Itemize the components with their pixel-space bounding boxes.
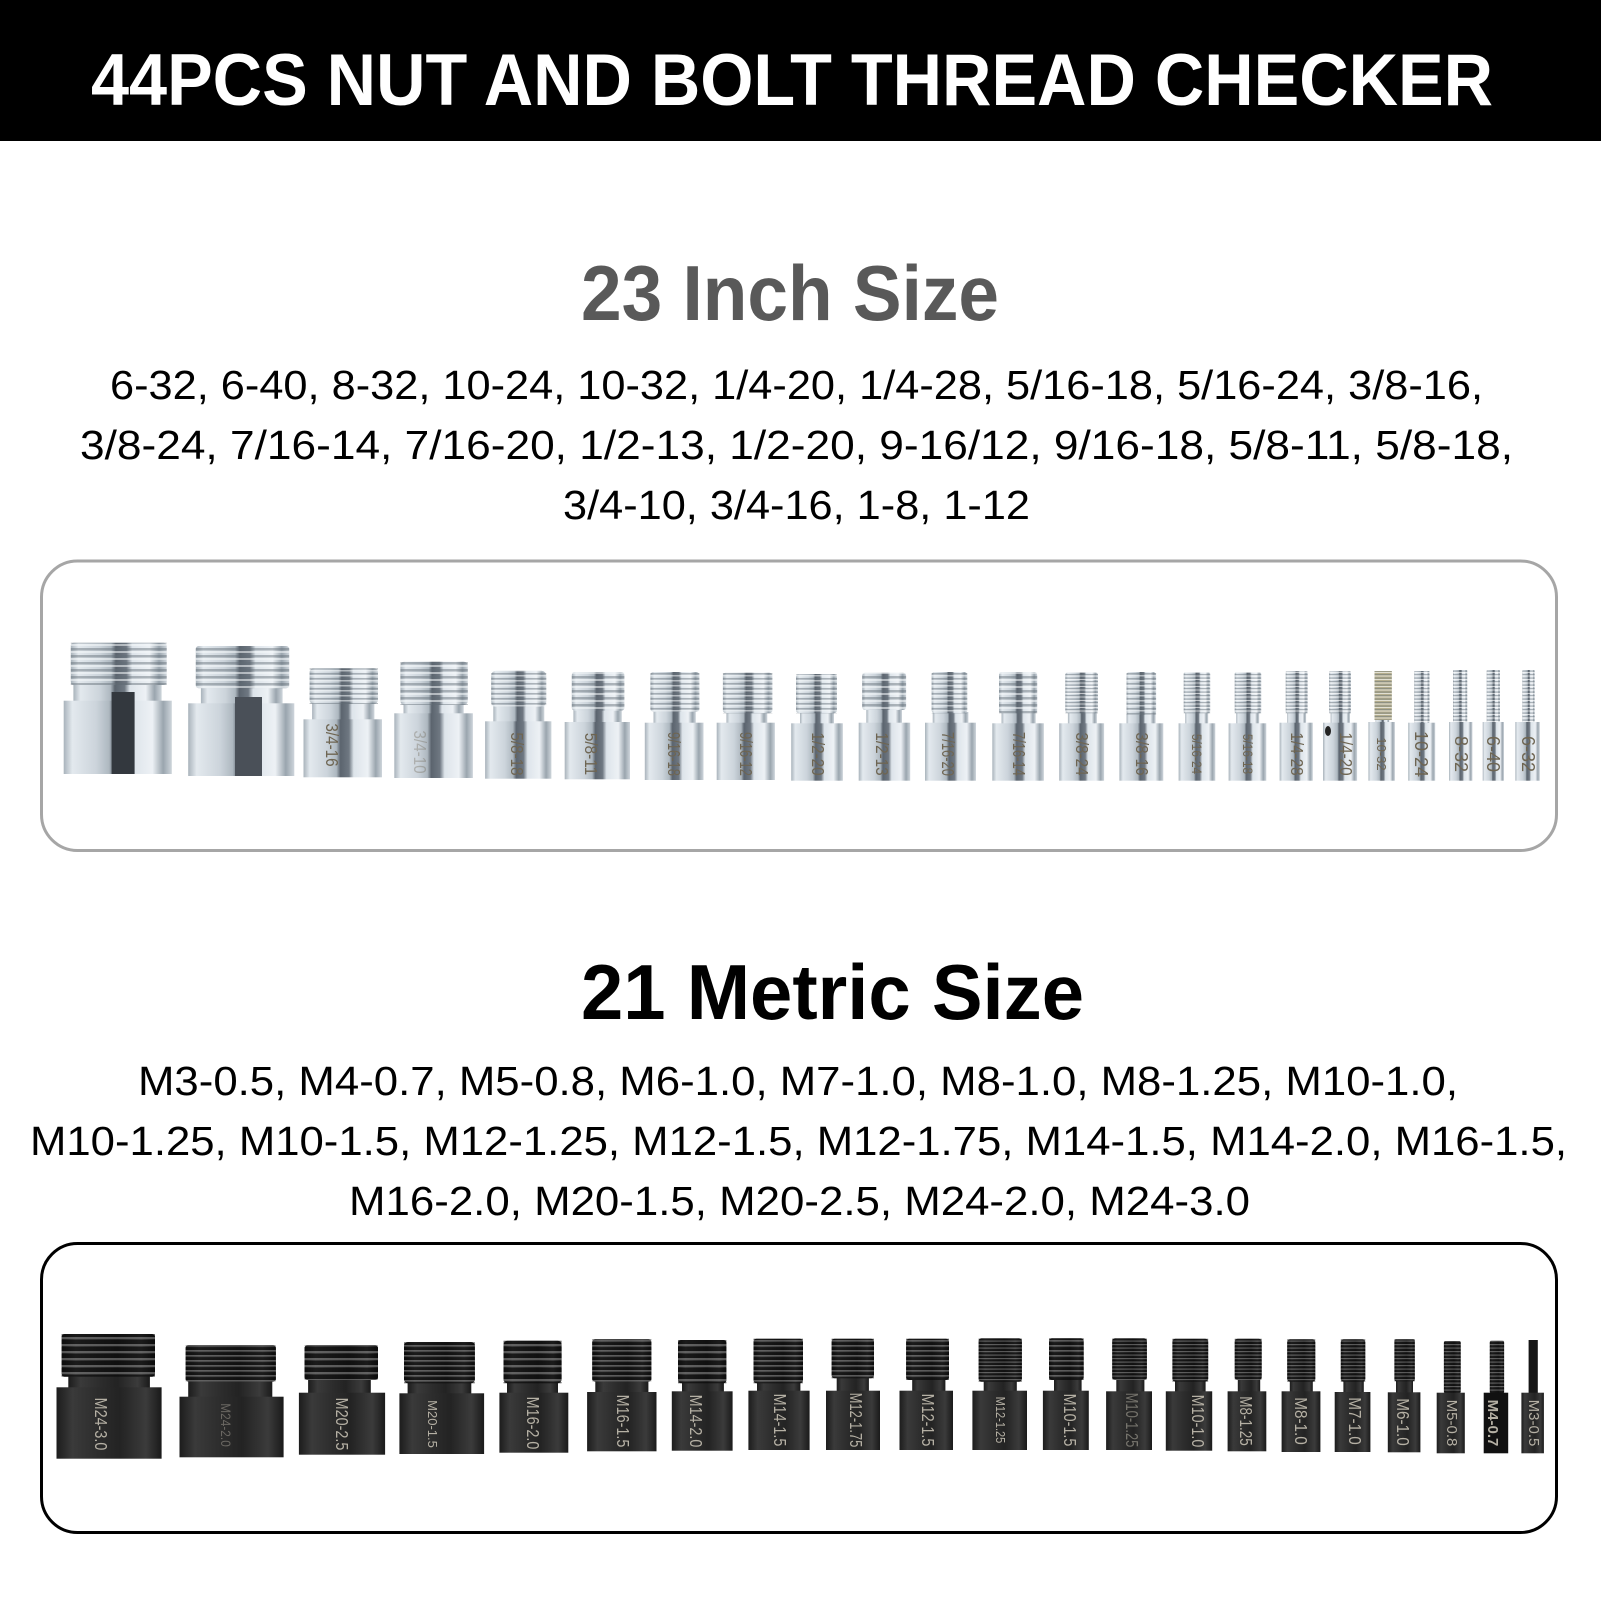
bolt: 1/4-28 [1280,671,1313,781]
bolt: 1/2-13: 1/2-13 [872,732,892,776]
bolt: M10-1.25: M10-1.25 [1121,1393,1141,1448]
bolt: M4-0.7 [1484,1341,1508,1453]
bolt: 5/16-18 [1229,672,1266,781]
bolt: 5/8-18: 5/8-18 [507,732,527,776]
text block: inch sizes: 6-32, 6-40, 8-32, 10-24, 10-32, 1/4-20, 1/4-28, 5/16-18, 5/16-24, 3/8-16, [110,362,1483,408]
bolt: 3/8-16 [1119,672,1163,781]
bolt: M16-1.5 [587,1339,656,1451]
bolt: 3/4-10: 3/4-10 [410,730,430,774]
bolt: M8-1.0 [1282,1339,1320,1452]
bolt: 9/16-12 [717,673,775,780]
bolt: M4-0.7: M4-0.7 [1484,1400,1501,1446]
bolt: 1/4-28: 1/4-28 [1287,732,1307,776]
bolt: M10-1.5: M10-1.5 [1060,1394,1079,1446]
bolt: M12-1.5: M12-1.5 [918,1394,937,1446]
bolt: 5/8-18 [485,671,551,779]
bolt: 5/16-24: 5/16-24 [1189,734,1205,774]
bolt: M14-1.5 [748,1339,810,1450]
bolt: 10-24 [1408,671,1435,781]
bolt: 5/16-24 [1179,672,1215,781]
title banner [0,0,1601,141]
bolt: 3/8-24: 3/8-24 [1072,732,1092,776]
bolt: 10-32 [1368,671,1395,781]
bolt: M20-2.5: M20-2.5 [332,1398,351,1450]
bolt: M10-1.0 [1166,1339,1212,1451]
bolt: 8-32: 8-32 [1451,736,1471,772]
bolt: M12-1.25: M12-1.25 [993,1397,1008,1444]
bolt: M24-2.0 [180,1345,284,1457]
bolt: 7/16-20 [925,672,976,781]
bolt: M3-0.5: M3-0.5 [1525,1400,1542,1446]
bolt: 8-32 [1449,670,1472,781]
bolt: 3/8-16: 3/8-16 [1132,732,1152,776]
bolt: 1/4-20 [1323,671,1357,781]
bolt: M24-3.0 [56,1334,162,1459]
bolt: M14-2.0: M14-2.0 [686,1395,705,1447]
bolt: 10-24: 10-24 [1411,731,1431,777]
text block: metric sizes [30,1058,1567,1224]
text block: metric sizes: M16-2.0, M20-1.5, M20-2.5, M24-2.0, M24-3.0 [349,1178,1250,1224]
bolt: 3/8-24 [1059,672,1104,781]
bolt: 1-8 [188,646,294,776]
bolt: M24-3.0: M24-3.0 [91,1398,110,1450]
bolt: M10-1.5 [1043,1338,1089,1450]
bolt: M5-0.8 [1437,1341,1465,1453]
text block: inch sizes [80,362,1513,528]
bolt: 9/16-18 [645,672,704,780]
bolt: M7-1.0: M7-1.0 [1345,1397,1365,1445]
bolt: 5/16-18: 5/16-18 [1240,734,1256,774]
text block: inch sizes: 3/8-24, 7/16-14, 7/16-20, 1/2-13, 1/2-20, 9-16/12, 9/16-18, 5/8-11, 5/8-18, [80,422,1513,468]
heading: 21 Metric Size: 21 Metric Size [581,948,1084,1036]
bolt: 1/4-20: 1/4-20 [1336,732,1356,776]
text block: metric sizes: M3-0.5, M4-0.7, M5-0.8, M6-1.0, M7-1.0, M8-1.0, M8-1.25, M10-1.0, [138,1058,1458,1104]
bolt: 6-40 [1483,670,1504,781]
bolt: M12-1.25 [972,1338,1027,1450]
bolt: M6-1.0: M6-1.0 [1393,1398,1413,1446]
bolt: 5/8-11: 5/8-11 [581,733,601,775]
bolt: 1/2-13 [859,673,910,781]
bolt: M20-1.5: M20-1.5 [425,1400,440,1448]
text block: metric sizes: M10-1.25, M10-1.5, M12-1.25, M12-1.5, M12-1.75, M14-1.5, M14-2.0, M16-1.5, [30,1118,1567,1164]
panel: inch thread checkers [42,561,1556,850]
heading: 23 Inch Size: 23 Inch Size [581,249,999,337]
bolt: M5-0.8: M5-0.8 [1443,1400,1460,1446]
bolt: M8-1.25: M8-1.25 [1235,1396,1255,1446]
bolt: M20-2.5 [299,1345,385,1455]
bolt: M24-2.0: M24-2.0 [218,1403,234,1447]
text block: inch sizes: 3/4-10, 3/4-16, 1-8, 1-12 [563,482,1030,528]
bolt: 1-12 [64,643,172,774]
bolt: 10-32: 10-32 [1374,737,1389,771]
bolt: M16-2.0 [499,1341,568,1453]
bolt: 1/2-20: 1/2-20 [808,732,828,776]
panel: metric thread checkers [42,1244,1556,1532]
bolt: 5/8-11 [565,672,630,779]
bolt: M14-2.0 [672,1340,733,1451]
bolt: 3/4-10 [394,662,473,778]
bolt: M10-1.25 [1106,1338,1152,1450]
bolt: M7-1.0 [1335,1339,1370,1452]
bolt: M3-0.5 [1521,1340,1544,1453]
bolt: 7/16-20: 7/16-20 [937,732,957,776]
bolt: M14-1.5: M14-1.5 [770,1394,789,1446]
bolt: 9/16-12: 9/16-12 [735,732,755,776]
bolt: 7/16-14 [992,672,1044,781]
bolt: M10-1.0: M10-1.0 [1188,1395,1207,1447]
bolt: M8-1.0: M8-1.0 [1291,1397,1311,1445]
bolt: M12-1.75 [826,1339,880,1450]
bolt: 9/16-18: 9/16-18 [663,732,683,776]
bolt: 3/4-16: 3/4-16 [322,723,342,767]
bolt: 7/16-14: 7/16-14 [1008,732,1028,776]
bolt: M16-2.0: M16-2.0 [523,1397,542,1449]
title banner: 44PCS NUT AND BOLT THREAD CHECKER [91,40,1493,121]
bolt: 6-40: 6-40 [1483,736,1503,772]
bolt: 6-32 [1515,670,1540,781]
bolt: M6-1.0 [1388,1339,1420,1452]
bolt: M20-1.5 [399,1342,484,1454]
bolt: 6-32: 6-32 [1518,736,1538,772]
bolt: M8-1.25 [1228,1339,1266,1451]
bolt: 1/2-20 [791,674,843,781]
bolt: 3/4-16 [304,668,382,777]
bolt: M12-1.5 [900,1339,953,1450]
bolt: M12-1.75: M12-1.75 [845,1393,865,1448]
bolt: M16-1.5: M16-1.5 [613,1395,632,1447]
